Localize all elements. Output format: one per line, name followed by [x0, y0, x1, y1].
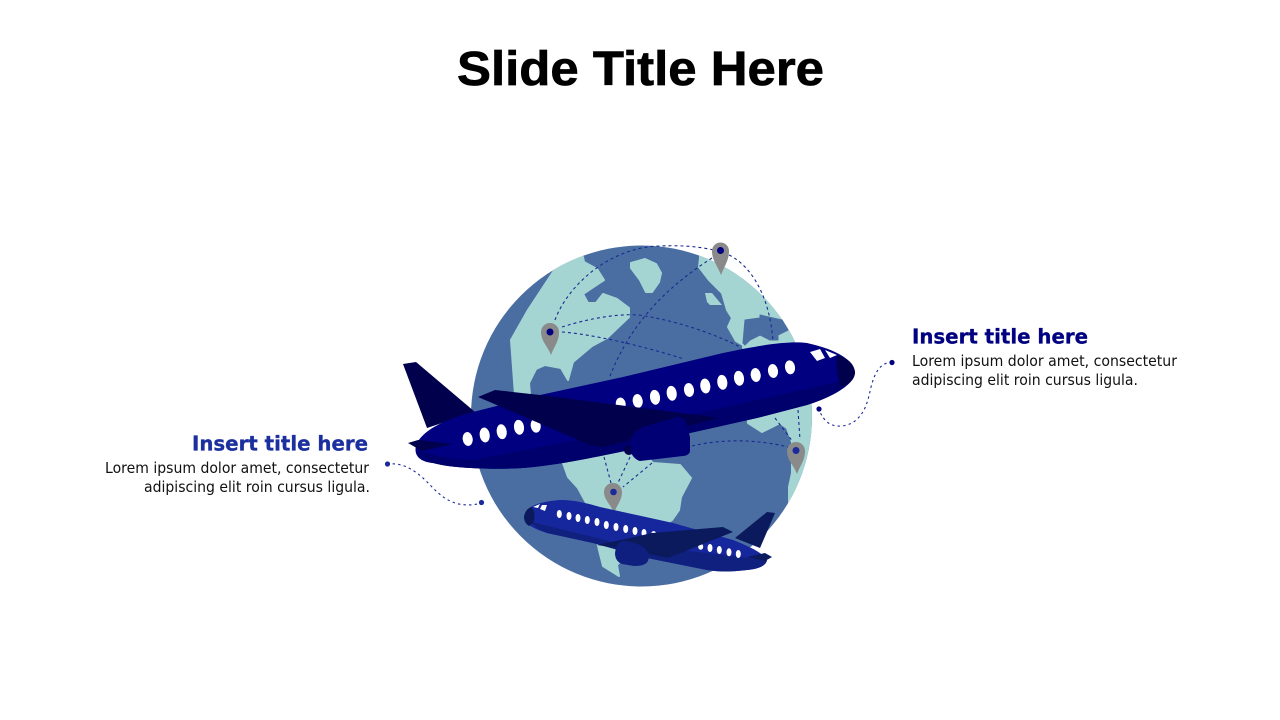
connector: left — [385, 461, 484, 505]
small airplane — [524, 500, 775, 572]
text block: left — [105, 459, 370, 496]
globe ocean — [471, 246, 812, 586]
engine exhaust — [624, 445, 634, 455]
text block: right: adipiscing elit roin cursus ligula. — [912, 371, 1138, 389]
map pin: north america — [541, 323, 559, 355]
tailplane — [408, 440, 453, 451]
cabin windows — [557, 510, 741, 558]
text block: right: Lorem ipsum dolor amet, consectetur — [912, 352, 1178, 370]
large airplane — [403, 342, 855, 469]
cockpit nose — [524, 507, 534, 526]
land: south america — [563, 450, 691, 576]
land: greenland — [631, 259, 661, 292]
callout: right — [816, 324, 1178, 426]
windshield — [810, 349, 837, 361]
heading: left: Insert title here — [192, 432, 368, 456]
tailplane — [747, 553, 772, 561]
engine — [630, 417, 690, 461]
map pin: right — [787, 442, 805, 474]
heading: right: Insert title here — [912, 324, 1088, 348]
globe illustration — [471, 240, 830, 586]
land: north america — [511, 250, 629, 395]
cockpit nose — [837, 355, 855, 387]
cabin windows — [462, 360, 796, 447]
engine — [615, 541, 649, 566]
inland sea — [743, 315, 788, 345]
belly shade — [532, 522, 767, 572]
text block: right — [912, 352, 1178, 389]
belly shade — [417, 378, 852, 469]
connector: right — [816, 360, 895, 426]
continents — [511, 240, 830, 576]
map pin: top — [712, 242, 729, 275]
map pin: south america — [604, 483, 622, 513]
text block: left: adipiscing elit roin cursus ligula. — [144, 478, 370, 496]
island — [705, 293, 722, 305]
text block: left: Lorem ipsum dolor amet, consectetur — [105, 459, 370, 477]
land: eurasia and australia edge — [698, 256, 812, 503]
fuselage — [524, 500, 767, 572]
route lines — [555, 246, 800, 487]
fuselage — [415, 342, 855, 469]
title: Slide Title Here — [457, 43, 824, 96]
tail fin — [403, 362, 475, 428]
main wing — [478, 390, 720, 447]
windshield — [533, 504, 547, 511]
tail fin — [735, 512, 775, 548]
callout: left — [105, 432, 484, 505]
main wing — [597, 527, 733, 558]
